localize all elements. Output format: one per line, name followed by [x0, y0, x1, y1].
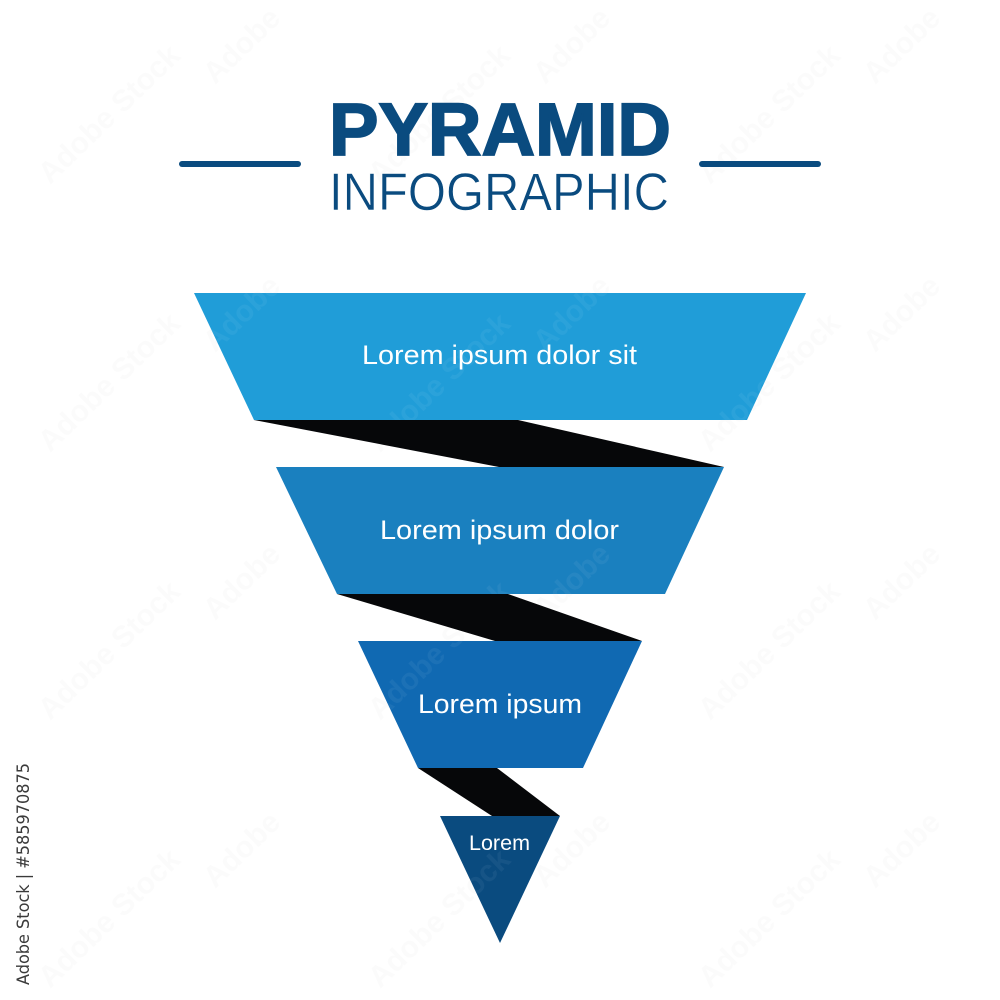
black connector 3	[418, 768, 560, 816]
title line 2: INFOGRAPHIC: INFOGRAPHIC	[329, 163, 669, 222]
tier 4	[440, 816, 560, 943]
tier 4 label: Lorem	[469, 832, 530, 855]
tier 3	[358, 641, 642, 768]
left title rule	[179, 161, 301, 167]
tier 3 label: Lorem ipsum	[418, 689, 582, 719]
tier 1	[194, 293, 806, 420]
title line 1: PYRAMID: PYRAMID	[329, 88, 671, 171]
tier 1 label: Lorem ipsum dolor sit	[362, 340, 638, 370]
black connector 2	[337, 594, 642, 641]
tier 2 label: Lorem ipsum dolor	[380, 515, 619, 545]
title	[329, 88, 671, 222]
tier 2	[276, 467, 724, 594]
stock id side caption: Adobe Stock | #585970875	[14, 763, 33, 985]
black connector 1	[254, 420, 724, 467]
funnel diagram	[194, 293, 806, 943]
right title rule	[699, 161, 821, 167]
